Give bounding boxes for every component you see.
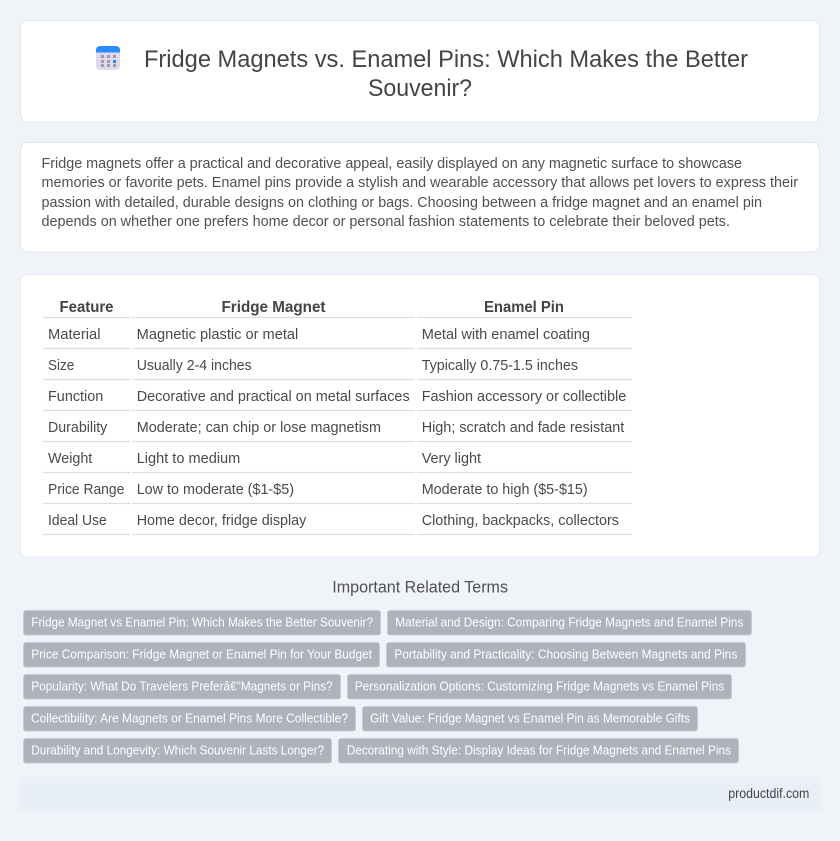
- tag: [388, 610, 752, 635]
- row: ideal use: Clothing, backpacks, collectors: [422, 513, 619, 529]
- tag: Popularity: What Do Travelers Preferâ€"Magnets or Pins?: [31, 680, 333, 694]
- row: price range: Price Range: [48, 482, 124, 498]
- row: size: Size: [48, 358, 74, 374]
- row: ideal use: Ideal Use: [48, 513, 107, 529]
- footer: [20, 777, 820, 811]
- tag: Collectibility: Are Magnets or Enamel Pins More Collectible?: [31, 712, 348, 726]
- row: durability: Moderate; can chip or lose magnetism: [137, 420, 381, 436]
- row: price range: Low to moderate ($1-$5): [137, 482, 294, 498]
- intro paragraph: memories or favorite pets. Enamel pins provide a stylish and wearable accessory that allows pet lovers to express their: [42, 174, 798, 191]
- row: size: Usually 2-4 inches: [137, 358, 252, 374]
- row: ideal use: Home decor, fridge display: [137, 513, 307, 529]
- row: weight: [48, 451, 481, 467]
- tag: [386, 642, 746, 667]
- tag: [24, 610, 380, 635]
- related term tags: [24, 610, 752, 763]
- heading: important related terms: Important Related Terms: [332, 578, 508, 596]
- tag: [24, 706, 356, 731]
- row: ideal use: [48, 513, 619, 529]
- tag: Material and Design: Comparing Fridge Magnets and Enamel Pins: [395, 616, 743, 630]
- row: size: Typically 0.75-1.5 inches: [422, 358, 578, 374]
- row: durability: [48, 420, 624, 436]
- tag: Personalization Options: Customizing Fridge Magnets vs Enamel Pins: [355, 680, 724, 694]
- title: Fridge Magnets vs. Enamel Pins: Which Makes the Better: [144, 46, 748, 73]
- panel: introduction: [20, 142, 820, 252]
- tag: Fridge Magnet vs Enamel Pin: Which Makes the Better Souvenir?: [31, 616, 373, 630]
- title: Souvenir?: [368, 75, 472, 102]
- row: weight: Very light: [422, 451, 481, 467]
- row: material: Material: [48, 327, 100, 343]
- row: material: Metal with enamel coating: [422, 327, 590, 343]
- row: material: [48, 327, 590, 343]
- row: material: Magnetic plastic or metal: [137, 327, 298, 343]
- icon: calendar: [96, 46, 120, 70]
- panel: title header: [20, 20, 820, 122]
- row: function: Fashion accessory or collectible: [422, 389, 626, 405]
- tag: Portability and Practicality: Choosing Between Magnets and Pins: [394, 648, 737, 662]
- footer source text: productdif.com: [728, 786, 809, 801]
- panel: comparison table: [20, 274, 820, 557]
- intro paragraph: Fridge magnets offer a practical and decorative appeal, easily displayed on any magnetic surface to showcase: [42, 155, 742, 172]
- tag: Gift Value: Fridge Magnet vs Enamel Pin as Memorable Gifts: [370, 712, 690, 726]
- intro paragraph: depends on whether one prefers home decor or personal fashion statements to celebrate their beloved pets.: [42, 213, 730, 230]
- row: weight: Weight: [48, 451, 92, 467]
- tag: [362, 706, 698, 731]
- row: durability: Durability: [48, 420, 108, 436]
- tag: Decorating with Style: Display Ideas for Fridge Magnets and Enamel Pins: [347, 744, 731, 758]
- row: weight: Light to medium: [137, 451, 240, 467]
- row: function: Decorative and practical on metal surfaces: [137, 389, 410, 405]
- table header row: Fridge Magnet: [222, 299, 326, 316]
- row: size: [48, 358, 578, 374]
- tag: [24, 738, 332, 763]
- table header row: [60, 299, 564, 316]
- row: function: [48, 389, 626, 405]
- row: durability: High; scratch and fade resistant: [422, 420, 624, 436]
- table header row: Enamel Pin: [484, 299, 564, 316]
- tag: [348, 674, 732, 699]
- tag: [24, 674, 340, 699]
- row: function: Function: [48, 389, 103, 405]
- tag: [24, 642, 380, 667]
- tag: Durability and Longevity: Which Souvenir Lasts Longer?: [31, 744, 324, 758]
- intro paragraph: passion with detailed, durable designs on clothing or bags. Choosing between a fridge magnet and an enamel pin: [42, 194, 762, 211]
- tag: Price Comparison: Fridge Magnet or Enamel Pin for Your Budget: [31, 648, 372, 662]
- row: price range: Moderate to high ($5-$15): [422, 482, 588, 498]
- tag: [338, 738, 738, 763]
- row: price range: [48, 482, 588, 498]
- table header row: Feature: [60, 299, 114, 316]
